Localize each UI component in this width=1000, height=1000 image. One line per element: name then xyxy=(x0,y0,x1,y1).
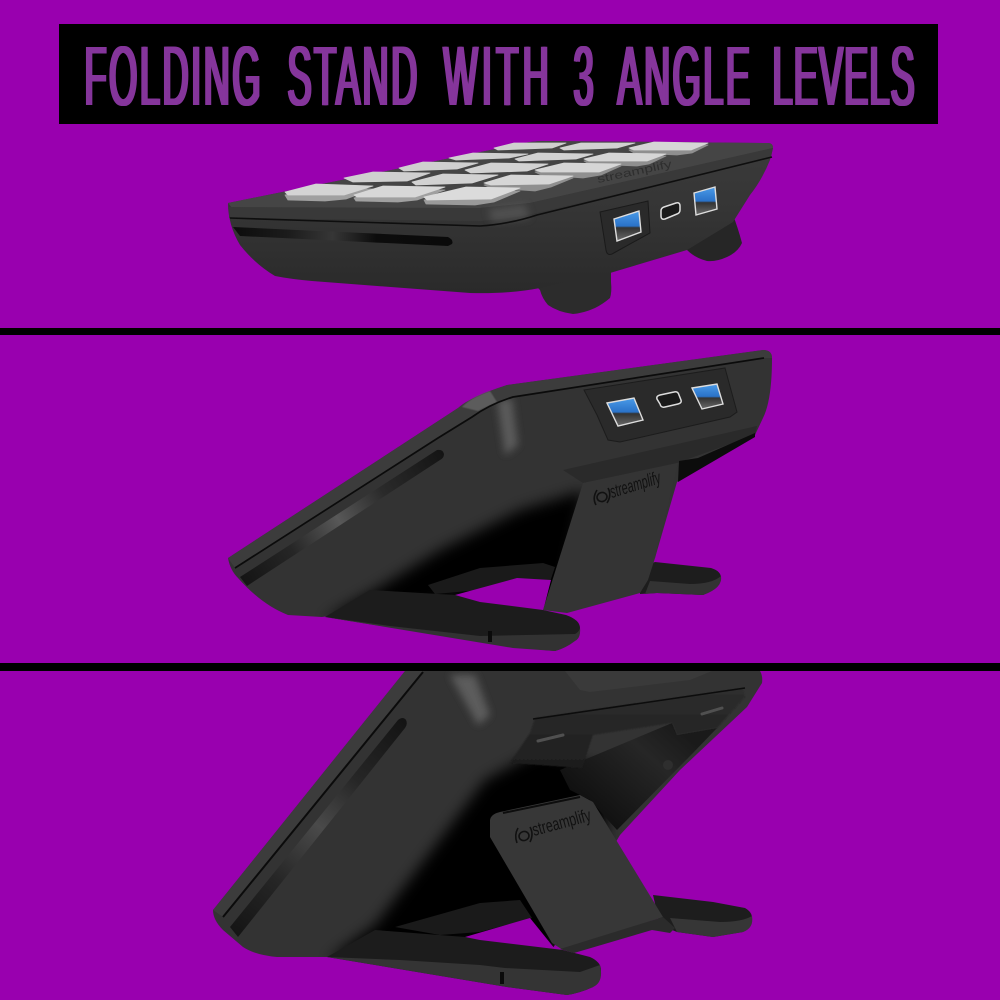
front row keys xyxy=(285,184,520,205)
front foot xyxy=(535,265,611,314)
back row keys xyxy=(494,142,708,155)
keys xyxy=(285,142,708,205)
underside plate xyxy=(563,426,757,483)
black recess xyxy=(678,433,755,482)
plate seam xyxy=(533,688,745,719)
rear foot xyxy=(680,215,742,261)
side slot xyxy=(230,718,407,937)
edge seam xyxy=(235,358,764,568)
divider: upper xyxy=(0,328,1000,335)
body highlight xyxy=(497,398,518,455)
lip xyxy=(213,671,423,917)
port: USB-C xyxy=(661,203,680,219)
top logo: streamplify xyxy=(596,158,674,186)
flap logo icon xyxy=(594,488,610,505)
title banner xyxy=(59,24,938,124)
title banner: LEVELS xyxy=(771,29,914,123)
stand flap xyxy=(543,463,678,613)
port: USB right xyxy=(692,384,723,409)
third row keys xyxy=(399,162,621,178)
flap lip xyxy=(560,917,675,953)
title banner: STAND xyxy=(286,29,418,123)
stand flap xyxy=(490,795,663,950)
panel: medium angle level xyxy=(228,350,772,651)
title banner: ANGLE xyxy=(616,29,751,123)
front foot xyxy=(325,590,580,651)
purple opening xyxy=(455,578,551,611)
lip highlight xyxy=(462,391,497,411)
rear foot xyxy=(653,895,752,937)
title banner: 3 xyxy=(572,29,592,123)
inner shadow xyxy=(327,750,610,960)
edge seam xyxy=(230,157,772,226)
dark recess xyxy=(560,723,717,830)
side slot xyxy=(240,450,444,586)
rear foot xyxy=(640,562,721,595)
port: USB-C xyxy=(657,392,681,407)
flap logo text: streamplify xyxy=(530,805,593,840)
title banner: WITH xyxy=(442,29,551,123)
purple opening xyxy=(465,918,555,949)
flap hinge xyxy=(503,797,580,813)
front lip xyxy=(229,148,773,221)
divider: lower xyxy=(0,663,1000,671)
front foot xyxy=(327,930,601,995)
inner rail xyxy=(395,900,532,935)
top ledge xyxy=(565,671,712,692)
inner rail xyxy=(428,563,555,594)
device silhouette xyxy=(228,350,772,617)
shading overlays xyxy=(213,671,745,960)
title banner: FOLDING xyxy=(83,29,262,123)
flap logo icon xyxy=(516,827,532,843)
side slot xyxy=(233,227,452,246)
port: USB left xyxy=(614,211,641,241)
top surface xyxy=(228,141,773,208)
flap logo text: streamplify xyxy=(607,467,663,502)
lip xyxy=(228,350,772,568)
pill vent right xyxy=(702,708,722,714)
fourth row keys xyxy=(449,153,666,166)
lip highlight xyxy=(488,204,530,222)
body highlight xyxy=(450,675,490,725)
upper plate xyxy=(514,694,744,767)
edge seam xyxy=(223,672,423,917)
shading overlays xyxy=(228,350,772,620)
panel: steep angle level xyxy=(213,671,762,995)
device silhouette xyxy=(213,671,762,957)
port: USB left xyxy=(607,398,643,426)
port bezel xyxy=(584,368,737,442)
screw xyxy=(663,760,673,770)
inner shadow xyxy=(322,490,585,620)
pill vent left xyxy=(538,735,563,741)
panel: flat angle level xyxy=(228,141,773,314)
port: USB right xyxy=(694,187,717,215)
port bezel xyxy=(600,201,650,254)
second row keys xyxy=(344,172,573,191)
device body xyxy=(228,141,773,293)
